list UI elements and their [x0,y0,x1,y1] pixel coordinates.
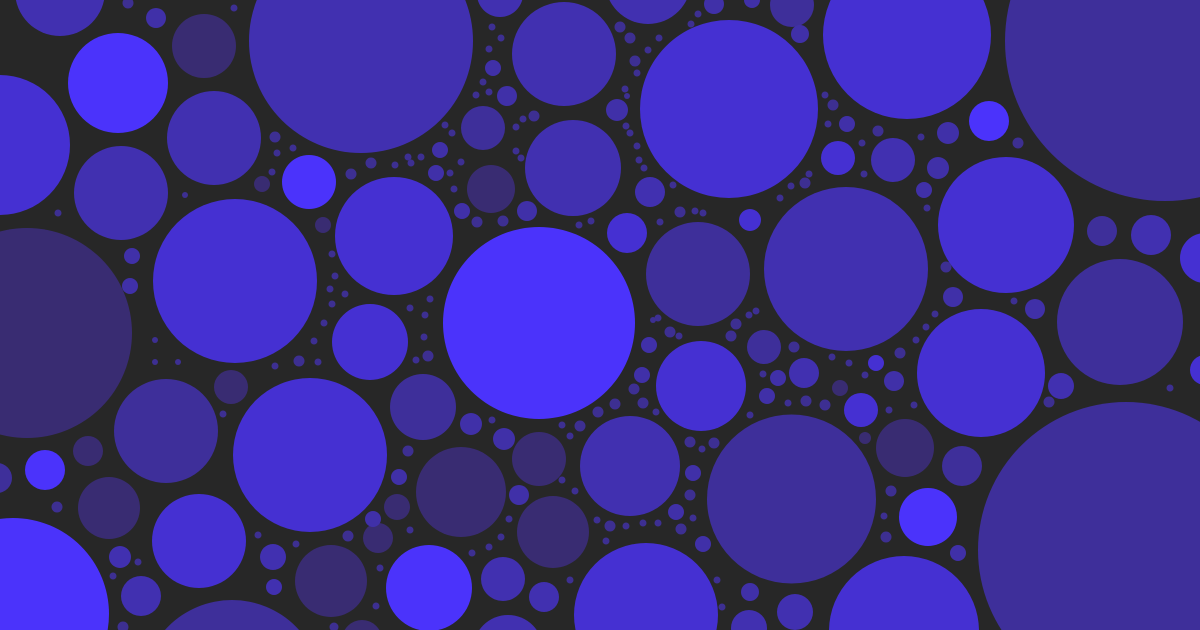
small filler circles: larger [122,0,1045,601]
circles: darkest shade [0,14,934,630]
circles: brightest shade [0,33,1009,630]
